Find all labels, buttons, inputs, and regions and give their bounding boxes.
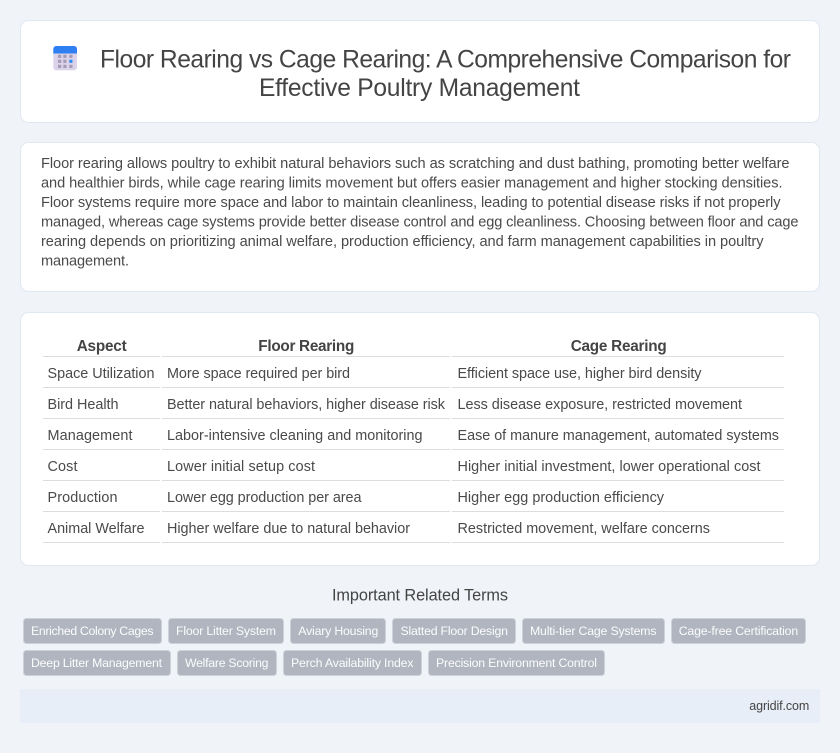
table header: Aspect xyxy=(77,338,127,355)
panel: header xyxy=(20,20,820,122)
title: Effective Poultry Management xyxy=(259,75,580,102)
table header: Floor Rearing xyxy=(258,338,354,355)
row: bird health: Less disease exposure, restricted movement xyxy=(458,397,742,413)
row: production: Production xyxy=(48,490,118,506)
tag: floor litter system: Floor Litter System xyxy=(176,624,276,638)
tag: floor litter system xyxy=(168,618,284,644)
tag: cage-free certification xyxy=(672,618,806,644)
tag: slatted floor design xyxy=(392,618,516,644)
row: management: Ease of manure management, automated systems xyxy=(458,428,779,444)
row: cost: Higher initial investment, lower operational cost xyxy=(458,459,760,475)
row: cost: Cost xyxy=(48,459,78,475)
row: management: Labor-intensive cleaning and monitoring xyxy=(167,428,422,444)
row: space utilization: More space required per bird xyxy=(167,366,350,382)
tag: aviary housing: Aviary Housing xyxy=(298,624,378,638)
panel: comparison table xyxy=(20,312,820,566)
row: animal welfare: Higher welfare due to natural behavior xyxy=(167,521,410,537)
tag: perch availability index: Perch Availability Index xyxy=(291,656,414,670)
row: space utilization xyxy=(43,366,784,388)
table header: Cage Rearing xyxy=(571,338,667,355)
row: management xyxy=(43,428,784,450)
row: management: Management xyxy=(48,428,132,444)
row: bird health xyxy=(43,397,784,418)
tag: aviary housing xyxy=(290,618,386,644)
row: cost: Lower initial setup cost xyxy=(167,459,315,475)
row: space utilization: Efficient space use, higher bird density xyxy=(458,366,702,382)
panel: introduction xyxy=(20,142,820,292)
row: space utilization: Space Utilization xyxy=(48,366,154,382)
intro text block: Floor rearing allows poultry to exhibit natural behaviors such as scratching and dust bathing, promoting better welfare xyxy=(41,156,790,172)
tag: enriched colony cages: Enriched Colony Cages xyxy=(31,624,154,638)
tag: cage-free certification: Cage-free Certification xyxy=(679,624,798,638)
row: animal welfare: Animal Welfare xyxy=(48,521,144,537)
tag: slatted floor design: Slatted Floor Design xyxy=(400,624,508,638)
tag: welfare scoring xyxy=(178,650,276,676)
related term tags xyxy=(24,618,806,676)
tag: precision environment control: Precision Environment Control xyxy=(436,656,597,670)
intro text block: management. xyxy=(41,254,129,270)
intro text block: Floor systems require more space and labor to maintain cleanliness, leading to potential disease risks if not properly xyxy=(41,195,781,211)
row: bird health: Bird Health xyxy=(48,397,118,413)
row: production xyxy=(43,490,784,512)
row: bird health: Better natural behaviors, higher disease risk xyxy=(167,397,446,413)
tag: welfare scoring: Welfare Scoring xyxy=(185,656,269,670)
row: cost xyxy=(43,459,784,480)
row: production: Higher egg production efficiency xyxy=(458,490,665,506)
row: animal welfare: Restricted movement, welfare concerns xyxy=(458,521,710,537)
intro text block: rearing depends on prioritizing animal welfare, production efficiency, and farm management capabilities in poultry xyxy=(41,234,764,250)
intro text block xyxy=(41,156,798,270)
tag: multi-tier cage systems xyxy=(522,618,664,644)
tag: deep litter management: Deep Litter Management xyxy=(31,656,163,670)
row: production: Lower egg production per area xyxy=(167,490,362,506)
footer: agridif.com xyxy=(749,699,809,713)
icon: calendar xyxy=(53,46,77,70)
title: Floor Rearing vs Cage Rearing: A Comprehensive Comparison for xyxy=(100,46,791,74)
table header xyxy=(43,338,784,356)
heading: related terms: Important Related Terms xyxy=(332,586,508,604)
tag: multi-tier cage systems: Multi-tier Cage Systems xyxy=(530,624,656,638)
tag: perch availability index xyxy=(284,650,422,676)
row: animal welfare xyxy=(43,521,784,542)
footer xyxy=(20,689,820,723)
intro text block: and healthier birds, while cage rearing limits movement but offers easier management and higher stocking densities. xyxy=(41,176,782,192)
tag: enriched colony cages xyxy=(24,618,162,644)
intro text block: managed, whereas cage systems provide better disease control and egg cleanliness. Choosing between floor and cage xyxy=(41,214,798,230)
tag: deep litter management xyxy=(24,650,170,676)
title xyxy=(100,46,791,102)
tag: precision environment control xyxy=(428,650,604,676)
